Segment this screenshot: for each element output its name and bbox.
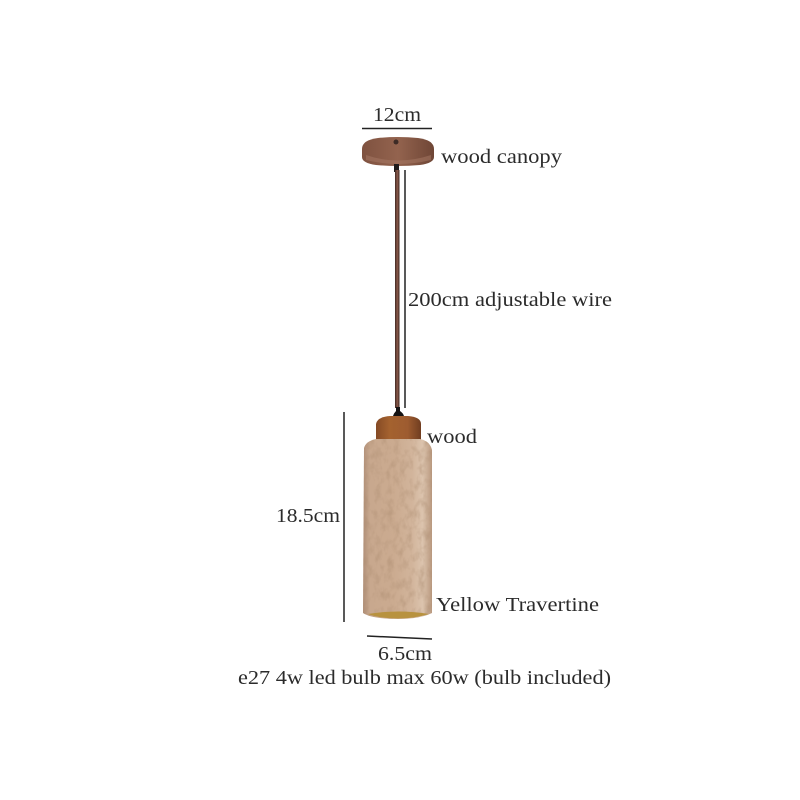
label: wood: wood xyxy=(427,426,477,448)
label: wood canopy: wood canopy xyxy=(441,146,562,168)
dimension line: shade height xyxy=(343,412,345,622)
dimension: shade width 6.5cm: 6.5cm xyxy=(378,643,432,665)
wood canopy xyxy=(362,137,434,166)
dimension line: wire length xyxy=(404,170,406,408)
caption: bulb specification: e27 4w led bulb max 60w (bulb included) xyxy=(238,667,611,689)
dimension: shade width 6.5cm xyxy=(367,636,432,665)
label: Yellow Travertine: Yellow Travertine xyxy=(436,594,599,616)
wood collar xyxy=(376,416,421,441)
shade opening: warm interior xyxy=(368,612,429,618)
label: 200cm adjustable wire: 200cm adjustable wire xyxy=(408,289,612,311)
label: 18.5cm: 18.5cm xyxy=(276,505,340,527)
dimension: canopy width 12cm: 12cm xyxy=(373,104,421,126)
travertine shade xyxy=(363,439,432,619)
wire: suspension rod xyxy=(394,164,400,408)
dimension: canopy width 12cm xyxy=(362,104,432,128)
lamp holder: black socket xyxy=(393,407,404,416)
